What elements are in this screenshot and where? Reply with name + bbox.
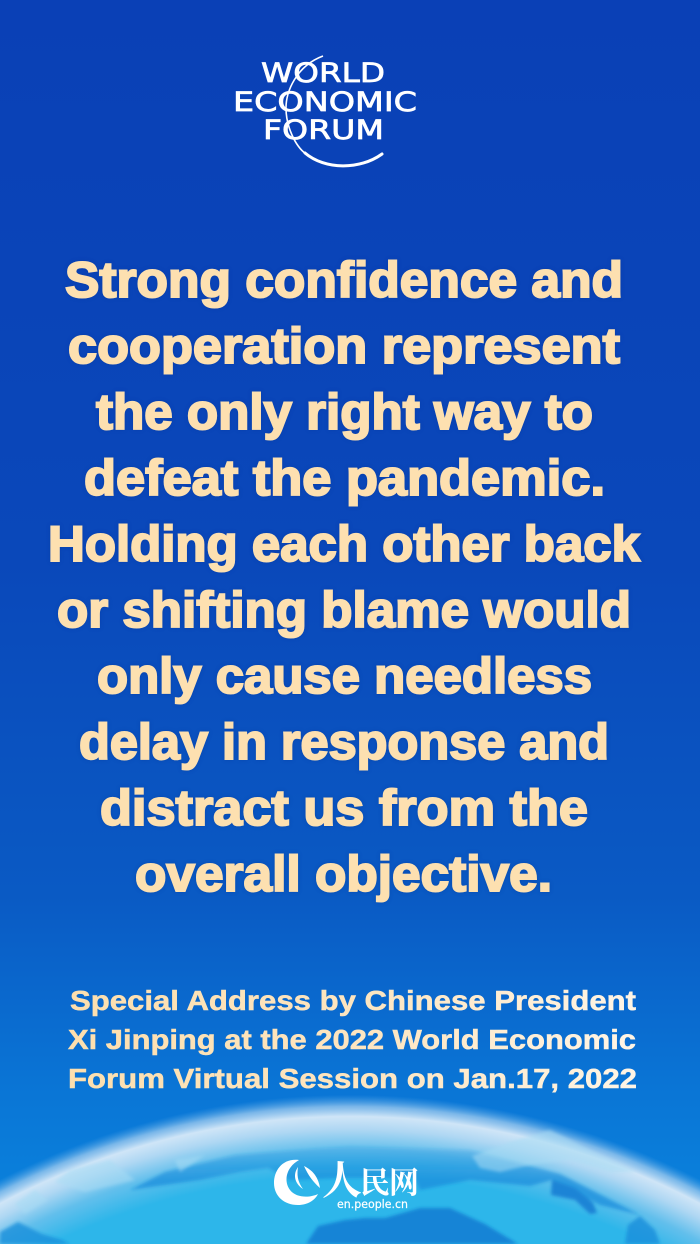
- attribution text: Special Address by Chinese President: [70, 985, 636, 1016]
- attribution text: [68, 985, 637, 1094]
- quote heading: Holding each other back: [48, 516, 640, 572]
- map: pale land patches: [15, 1130, 636, 1214]
- quote heading: only cause needless: [97, 648, 592, 704]
- quote heading: distract us from the: [100, 780, 588, 836]
- quote heading: Strong confidence and: [65, 252, 623, 308]
- quote heading: defeat the pandemic.: [84, 450, 605, 506]
- quote heading: or shifting blame would: [57, 582, 631, 638]
- World Economic Forum logo: WORLD: [261, 58, 385, 89]
- World Economic Forum logo: ECONOMIC: [233, 87, 417, 118]
- quote heading: cooperation represent: [68, 318, 620, 374]
- logo wordmark: 人: [322, 1149, 362, 1206]
- map: dark sea patches: [0, 1146, 660, 1244]
- quote heading: or shifting blame would: [57, 582, 631, 638]
- quote heading: the only right way to: [96, 384, 593, 440]
- World Economic Forum logo: FORUM: [263, 115, 384, 146]
- logo wordmark: 民: [360, 1158, 390, 1202]
- quote heading: the only right way to: [96, 384, 593, 440]
- logo swirl icon: [274, 1160, 320, 1205]
- logo wordmark: [322, 1149, 419, 1206]
- logo wordmark: 网: [389, 1158, 419, 1202]
- attribution text: Forum Virtual Session on Jan.17, 2022: [68, 1063, 637, 1094]
- attribution text: Xi Jinping at the 2022 World Economic: [68, 1024, 636, 1055]
- quote heading: delay in response and: [79, 714, 609, 770]
- globe: [0, 1092, 700, 1244]
- World Economic Forum logo: [233, 56, 417, 166]
- quote heading: cooperation represent: [68, 318, 620, 374]
- quote heading: overall objective.: [135, 846, 552, 902]
- quote heading: defeat the pandemic.: [84, 450, 605, 506]
- quote heading: delay in response and: [79, 714, 609, 770]
- quote heading: only cause needless: [97, 648, 592, 704]
- quote heading: Holding each other back: [48, 516, 640, 572]
- logo url: en.people.cn: [337, 1197, 408, 1211]
- quote heading: Strong confidence and: [65, 252, 623, 308]
- logo arc: [286, 56, 323, 154]
- People's Daily Online logo: [274, 1149, 419, 1211]
- quote heading: [48, 252, 640, 902]
- quote heading: overall objective.: [135, 846, 552, 902]
- quote heading: distract us from the: [100, 780, 588, 836]
